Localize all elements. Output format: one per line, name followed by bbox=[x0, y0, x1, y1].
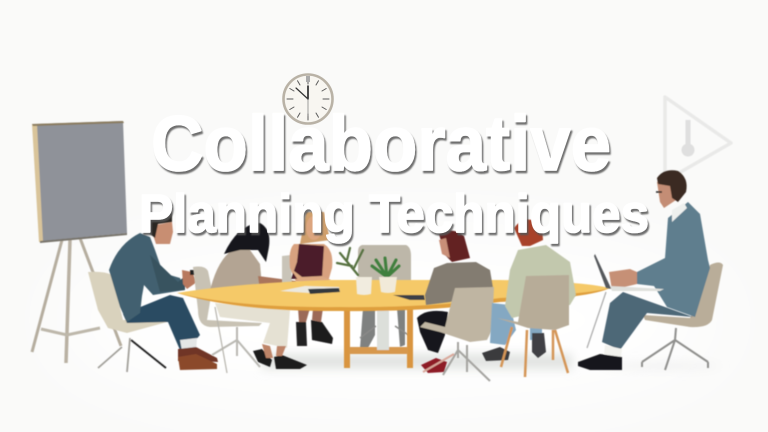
person 3: blonde woman in maroon top bbox=[282, 212, 333, 346]
chair 4 bbox=[420, 287, 494, 381]
trousers bbox=[215, 303, 290, 348]
red shoes bbox=[421, 358, 447, 373]
hair bbox=[300, 212, 330, 244]
icon: faint play triangle with thermometer bbox=[665, 97, 731, 181]
trousers bbox=[417, 311, 448, 353]
sock and shoe bbox=[604, 345, 622, 358]
head bbox=[657, 176, 676, 208]
chair 5 bbox=[497, 275, 569, 377]
person 1: man in navy suit on chair bbox=[88, 212, 218, 372]
chair 6 bbox=[642, 262, 723, 370]
title bbox=[139, 99, 649, 244]
laptop bbox=[594, 254, 612, 289]
chair 2 back bbox=[193, 266, 262, 327]
jacket bbox=[109, 233, 185, 322]
jacket bbox=[637, 202, 710, 317]
face bbox=[439, 238, 450, 258]
hands bbox=[609, 269, 637, 290]
hair bbox=[224, 223, 269, 262]
potted plants bbox=[337, 248, 399, 295]
arm bbox=[258, 276, 298, 291]
face bbox=[306, 216, 322, 240]
jeans bbox=[490, 303, 542, 345]
shoes bbox=[482, 347, 510, 361]
trousers bbox=[602, 292, 693, 350]
title line 1: Collaborative bbox=[151, 99, 611, 187]
shoes bbox=[178, 347, 218, 362]
head bbox=[150, 222, 173, 244]
person 2: woman in beige sweater bbox=[193, 223, 307, 373]
sweater bbox=[425, 262, 493, 305]
icon: wall clock bbox=[284, 74, 332, 124]
tabletop bbox=[177, 280, 610, 310]
flipchart on easel bbox=[32, 121, 127, 363]
floor shadows bbox=[262, 354, 720, 369]
title line 2: Planning Techniques bbox=[139, 184, 649, 244]
hand bbox=[182, 270, 197, 289]
papers and notebook bbox=[280, 286, 340, 293]
chair behind bbox=[282, 255, 292, 285]
person 4: woman with auburn hair on chair bbox=[417, 230, 494, 381]
legs and stretcher bbox=[344, 306, 413, 368]
person 6: man with glasses and laptop bbox=[578, 170, 723, 370]
legs bbox=[123, 295, 200, 350]
sweater bbox=[209, 250, 262, 296]
person 5: red-haired person in pale jacket bbox=[482, 219, 576, 377]
chair 1 bbox=[88, 272, 167, 372]
jacket bbox=[505, 245, 576, 318]
person behind table: chair and trousers bbox=[358, 245, 411, 348]
plant right bbox=[372, 258, 399, 293]
black shoes bbox=[253, 349, 272, 367]
conference table bbox=[177, 280, 610, 368]
hair bbox=[514, 219, 543, 246]
boots bbox=[296, 322, 307, 346]
plant left bbox=[337, 248, 372, 295]
torso and arms bbox=[290, 244, 332, 282]
hair bbox=[439, 230, 470, 262]
